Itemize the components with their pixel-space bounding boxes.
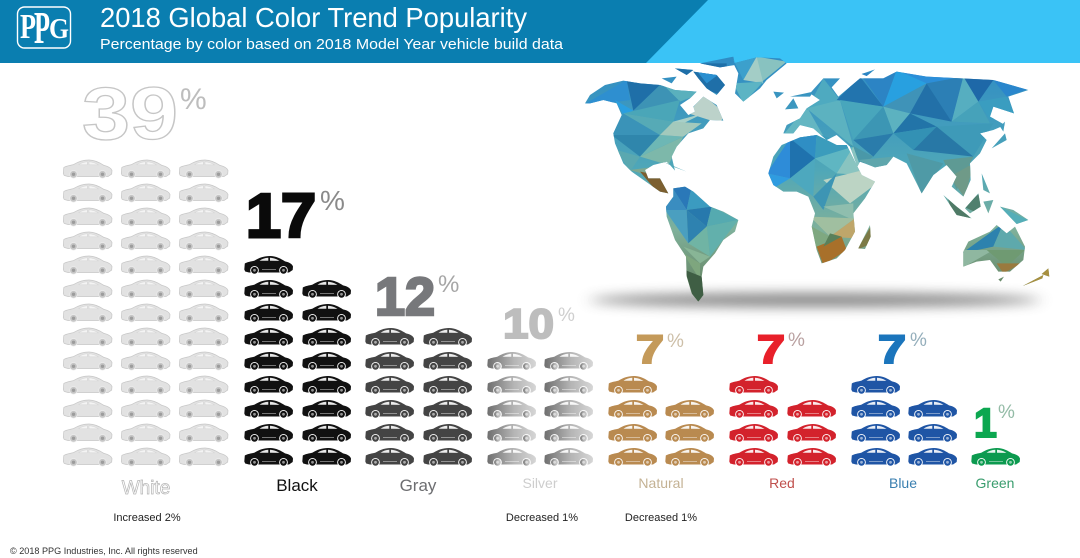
natural column: 7 percent: [608, 328, 714, 524]
17 number: 17: [246, 182, 316, 251]
Silver change note: Decreased 1%: [506, 512, 578, 524]
map shadow: [590, 293, 1040, 307]
White label: White: [122, 478, 170, 499]
islands facets: [857, 207, 1050, 287]
Greenland facets: [733, 57, 787, 103]
1 number: 1: [974, 400, 997, 446]
percent sign: %: [180, 83, 207, 116]
Green label: Green: [976, 475, 1014, 491]
Black label: Black: [276, 476, 318, 495]
percent sign: %: [998, 402, 1015, 423]
green car: [971, 448, 1020, 466]
copyright footer: © 2018 PPG Industries, Inc. All rights reserved: [10, 546, 198, 556]
Blue label: Blue: [889, 475, 917, 491]
red column: 7 percent: [729, 328, 836, 491]
white column: 39 percent: [63, 72, 228, 524]
silver column: 10 percent: [487, 300, 593, 524]
PPG logo: G: [49, 13, 69, 45]
percent sign: %: [558, 305, 575, 326]
Eurasia facets: [782, 70, 1030, 220]
Australia facets: [963, 226, 1025, 272]
subtitle: Percentage by color based on 2018 Model Year vehicle build data: [100, 37, 564, 53]
Gray label: Gray: [400, 476, 437, 495]
White change note: Increased 2%: [113, 512, 181, 524]
12 number: 12: [375, 267, 435, 327]
black cars: [244, 256, 351, 466]
PPG logo: [18, 3, 70, 53]
Natural label: Natural: [638, 475, 684, 491]
percent sign: %: [788, 330, 805, 351]
Silver label: Silver: [522, 475, 558, 491]
Red label: Red: [769, 475, 795, 491]
title: 2018 Global Color Trend Popularity: [100, 2, 527, 33]
10 number: 10: [503, 300, 554, 347]
Natural change note: Decreased 1%: [625, 512, 697, 524]
red cars: [729, 376, 836, 466]
39 number: 39: [82, 72, 178, 155]
percent sign: %: [320, 185, 345, 216]
percent sign: %: [438, 271, 459, 298]
blue cars: [851, 376, 957, 466]
gray cars: [365, 328, 472, 466]
silver cars: [487, 352, 593, 466]
low-poly world map: [585, 56, 1050, 302]
Africa facets: [767, 133, 877, 265]
gray column: 12 percent: [365, 267, 472, 495]
white cars: [63, 160, 228, 466]
percent sign: %: [910, 330, 927, 351]
blue column: 7 percent: [851, 328, 957, 491]
7 number: 7: [757, 328, 785, 372]
North America facets: [580, 63, 727, 195]
black column: 17 percent: [244, 182, 351, 495]
South America facets: [665, 187, 738, 303]
PPG logo: P: [20, 7, 36, 46]
PPG logo: P: [34, 3, 50, 53]
natural cars: [608, 376, 714, 466]
green column: 1 percent: [971, 400, 1020, 491]
7 number: 7: [878, 328, 906, 372]
header banner: [0, 0, 1080, 63]
percent sign: %: [667, 331, 684, 352]
7 number: 7: [636, 328, 664, 372]
